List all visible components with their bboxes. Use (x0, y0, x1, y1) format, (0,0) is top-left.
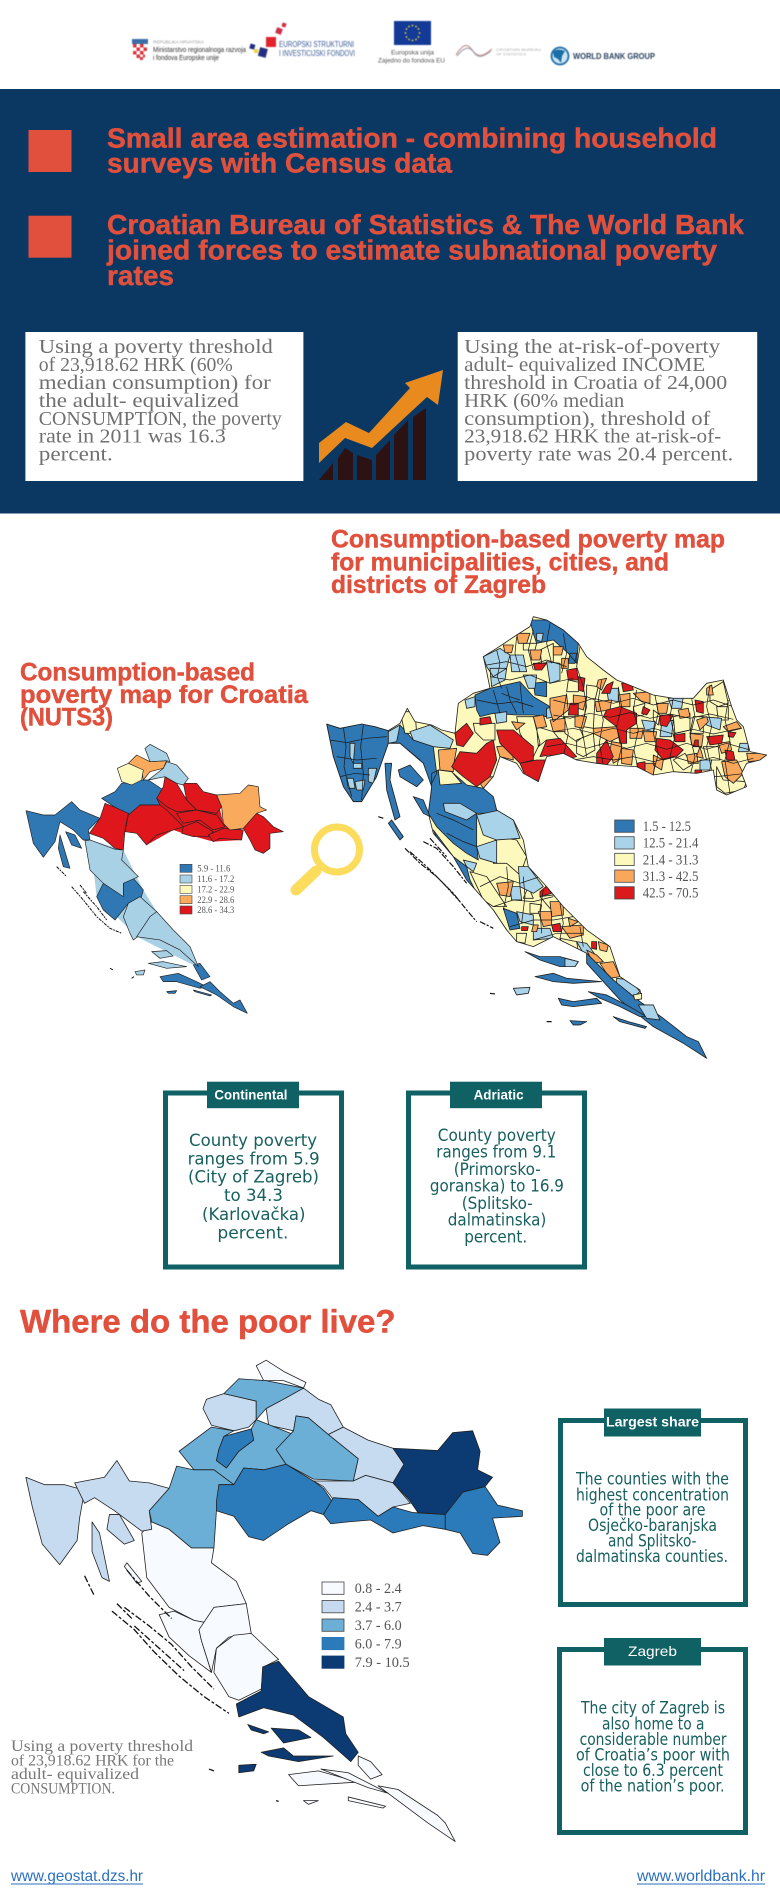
heading: small area estimation (107, 123, 717, 179)
text block: map note: adult- equivalized (11, 1766, 139, 1783)
callout: largest share: Largest share (606, 1414, 699, 1430)
callout: adriatic: goranska) to 16.9 (430, 1177, 564, 1196)
heading: NUTS3 map: poverty map for Croatia (20, 681, 309, 709)
text box: consumption poverty rate: median consumption) for (39, 372, 271, 394)
heading: municipal map: for municipalities, cities, and (331, 548, 669, 576)
legend: NUTS3 map: 22.9 - 28.6 (197, 896, 235, 906)
red municipalities (452, 663, 736, 949)
callout: largest share: of the poor are (600, 1501, 706, 1520)
text box: consumption poverty rate: of 23,918.62 HRK (60% (39, 354, 233, 376)
map outline (327, 617, 767, 1000)
legend: municipalities map (615, 819, 699, 902)
municipal boundary lattice (330, 623, 753, 947)
text box: income at-risk-of-poverty rate (458, 332, 757, 481)
logo: Croatian Bureau of Statistics (456, 45, 541, 56)
callout: largest share: Osječko-baranjska (588, 1516, 717, 1535)
icon: magnifying glass (296, 827, 360, 890)
link: geostat: www.geostat.dzs.hr (10, 1868, 144, 1885)
text box: income at-risk-of-poverty rate: HRK (60% median (464, 390, 624, 412)
map: share of the poor (26, 1360, 522, 1842)
legend: municipalities map: 31.3 - 42.5 (643, 869, 698, 885)
logo: European structural funds: EUROPSKI STRUKTURNI (279, 40, 354, 49)
callout: adriatic: ranges from 9.1 (436, 1143, 556, 1162)
callout: continental: County poverty (189, 1131, 317, 1150)
heading: joined forces: Croatian Bureau of Statistics & The World Bank (107, 209, 745, 240)
heading: joined forces (106, 209, 745, 291)
callout: adriatic: (Splitsko- (462, 1194, 533, 1213)
text box: consumption poverty rate: Using a poverty threshold (39, 336, 273, 358)
callout: largest share: The counties with the (575, 1470, 729, 1489)
heading: municipal map: Consumption-based poverty map (331, 526, 725, 554)
text box: income at-risk-of-poverty rate: Using the at-risk-of-poverty (464, 336, 720, 358)
islands and southern tail (385, 763, 707, 1058)
callout: continental: percent. (217, 1223, 288, 1242)
heading: NUTS3 map: (NUTS3) (20, 704, 113, 732)
callout: adriatic: Adriatic (474, 1086, 524, 1102)
callout: largest share: dalmatinska counties. (576, 1547, 728, 1566)
blue municipalities (327, 620, 578, 943)
callout: continental: (City of Zagreb) (188, 1168, 319, 1187)
legend: share map (322, 1581, 410, 1671)
icon: rising arrow with bars (319, 370, 443, 480)
text box: consumption poverty rate: CONSUMPTION, the poverty (39, 408, 282, 430)
callout: continental: Continental (214, 1086, 287, 1102)
bullet square 2 (28, 216, 72, 258)
text block: map note (11, 1738, 193, 1797)
light blue municipalities (347, 633, 748, 998)
text box: consumption poverty rate: the adult- equivalized (39, 390, 239, 412)
logo: Croatian Bureau of Statistics: CROATIAN BUREAU (496, 47, 541, 52)
callout: adriatic: (Primorsko- (454, 1160, 541, 1179)
callout: continental: to 34.3 (224, 1186, 283, 1205)
callout: Zagreb: of the nation’s poor. (581, 1776, 725, 1795)
legend: share map: 0.8 - 2.4 (355, 1581, 402, 1597)
yellow municipalities (400, 643, 747, 952)
callout: adriatic: dalmatinska) (448, 1211, 546, 1230)
legend: share map: 6.0 - 7.9 (355, 1636, 402, 1652)
text box: consumption poverty rate: rate in 2011 was 16.3 (39, 426, 226, 448)
logo: European structural funds: I INVESTICIJSKI FONDOVI (279, 49, 355, 58)
heading: NUTS3 map (20, 659, 309, 732)
legend: NUTS3 map: 5.9 - 11.6 (197, 864, 231, 874)
bullet square 1 (28, 130, 72, 172)
heading: small area estimation: Small area estimation - combining household (107, 123, 717, 154)
logo: World Bank Group (552, 48, 655, 64)
logo: Croatian ministry: i fondova Europske unije (153, 53, 219, 62)
text box: consumption poverty rate (25, 332, 303, 481)
text box: income at-risk-of-poverty rate: threshold in Croatia of 24,000 (464, 372, 727, 394)
callout: continental (166, 1082, 342, 1267)
callout: Zagreb (560, 1638, 746, 1832)
logo: Croatian ministry: Ministarstvo regionalnoga razvoja (153, 45, 247, 54)
legend: NUTS3 map: 11.6 - 17.2 (197, 875, 235, 885)
text box: income at-risk-of-poverty rate: 23,918.62 HRK the at-risk-of- (464, 426, 721, 448)
map: NUTS3 county poverty (26, 744, 283, 1013)
map: municipalities poverty (320, 600, 780, 1067)
text block: map note: of 23,918.62 HRK for the (11, 1752, 174, 1769)
logo strip (132, 21, 655, 64)
text box: income at-risk-of-poverty rate: consumption), threshold of (464, 408, 711, 430)
text box: income at-risk-of-poverty rate: adult- equivalized INCOME (464, 354, 705, 376)
callout: continental: ranges from 5.9 (188, 1149, 320, 1168)
legend: share map: 3.7 - 6.0 (355, 1618, 402, 1634)
callout: Zagreb: also home to a (602, 1714, 704, 1733)
legend: municipalities map: 1.5 - 12.5 (643, 819, 691, 835)
heading: joined forces: joined forces to estimate subnational poverty (106, 234, 718, 266)
heading: municipal map: districts of Zagreb (331, 571, 546, 599)
heading: small area estimation: surveys with Census data (107, 148, 453, 179)
text box: income at-risk-of-poverty rate: poverty rate was 20.4 percent. (464, 444, 733, 466)
logo: Croatian ministry (132, 39, 247, 62)
logo: EU flag (378, 21, 445, 64)
legend: municipalities map: 12.5 - 21.4 (643, 836, 699, 852)
callout: Zagreb: close to 6.3 percent (583, 1761, 723, 1780)
text block: map note: CONSUMPTION. (11, 1780, 115, 1797)
panel: navy header (0, 89, 780, 514)
legend: municipalities map: 21.4 - 31.3 (643, 852, 698, 868)
legend: NUTS3 map: 17.2 - 22.9 (197, 886, 235, 896)
callout: adriatic: percent. (464, 1228, 527, 1247)
heading: municipal map (331, 526, 725, 599)
legend: share map: 2.4 - 3.7 (355, 1600, 402, 1616)
callout: largest share (560, 1408, 746, 1604)
orange municipalities (438, 633, 767, 978)
callout: largest share: and Splitsko- (608, 1531, 697, 1550)
logo: EU flag: Zajedno do fondova EU (378, 58, 445, 64)
heading: where do the poor live: Where do the poor live? (20, 1304, 396, 1340)
heading: joined forces: rates (107, 260, 174, 291)
link: worldbank: www.worldbank.hr (636, 1868, 766, 1885)
callout: Zagreb: The city of Zagreb is (580, 1699, 725, 1718)
text box: consumption poverty rate: percent. (39, 444, 113, 466)
callout: adriatic (408, 1082, 584, 1267)
legend: NUTS3 map: 28.6 - 34.3 (197, 906, 235, 916)
logo: Croatian ministry: REPUBLIKA HRVATSKA (153, 40, 204, 44)
callout: adriatic: County poverty (438, 1126, 556, 1145)
logo: European structural funds (249, 22, 355, 58)
legend: share map: 7.9 - 10.5 (355, 1655, 410, 1671)
logo: EU flag: Europska unija (391, 50, 434, 56)
legend: NUTS3 map (180, 864, 235, 916)
heading: NUTS3 map: Consumption-based (20, 659, 255, 687)
logo: World Bank Group: WORLD BANK GROUP (573, 51, 655, 61)
legend: municipalities map: 42.5 - 70.5 (643, 886, 698, 902)
logo: Croatian Bureau of Statistics: OF STATISTICS (496, 52, 526, 56)
callout: Zagreb: of Croatia’s poor with (576, 1746, 730, 1765)
callout: largest share: highest concentration (576, 1485, 729, 1504)
callout: Zagreb: Zagreb (628, 1643, 677, 1659)
callout: Zagreb: considerable number (580, 1730, 727, 1749)
text block: map note: Using a poverty threshold (11, 1738, 193, 1755)
callout: continental: (Karlovačka) (202, 1205, 306, 1224)
